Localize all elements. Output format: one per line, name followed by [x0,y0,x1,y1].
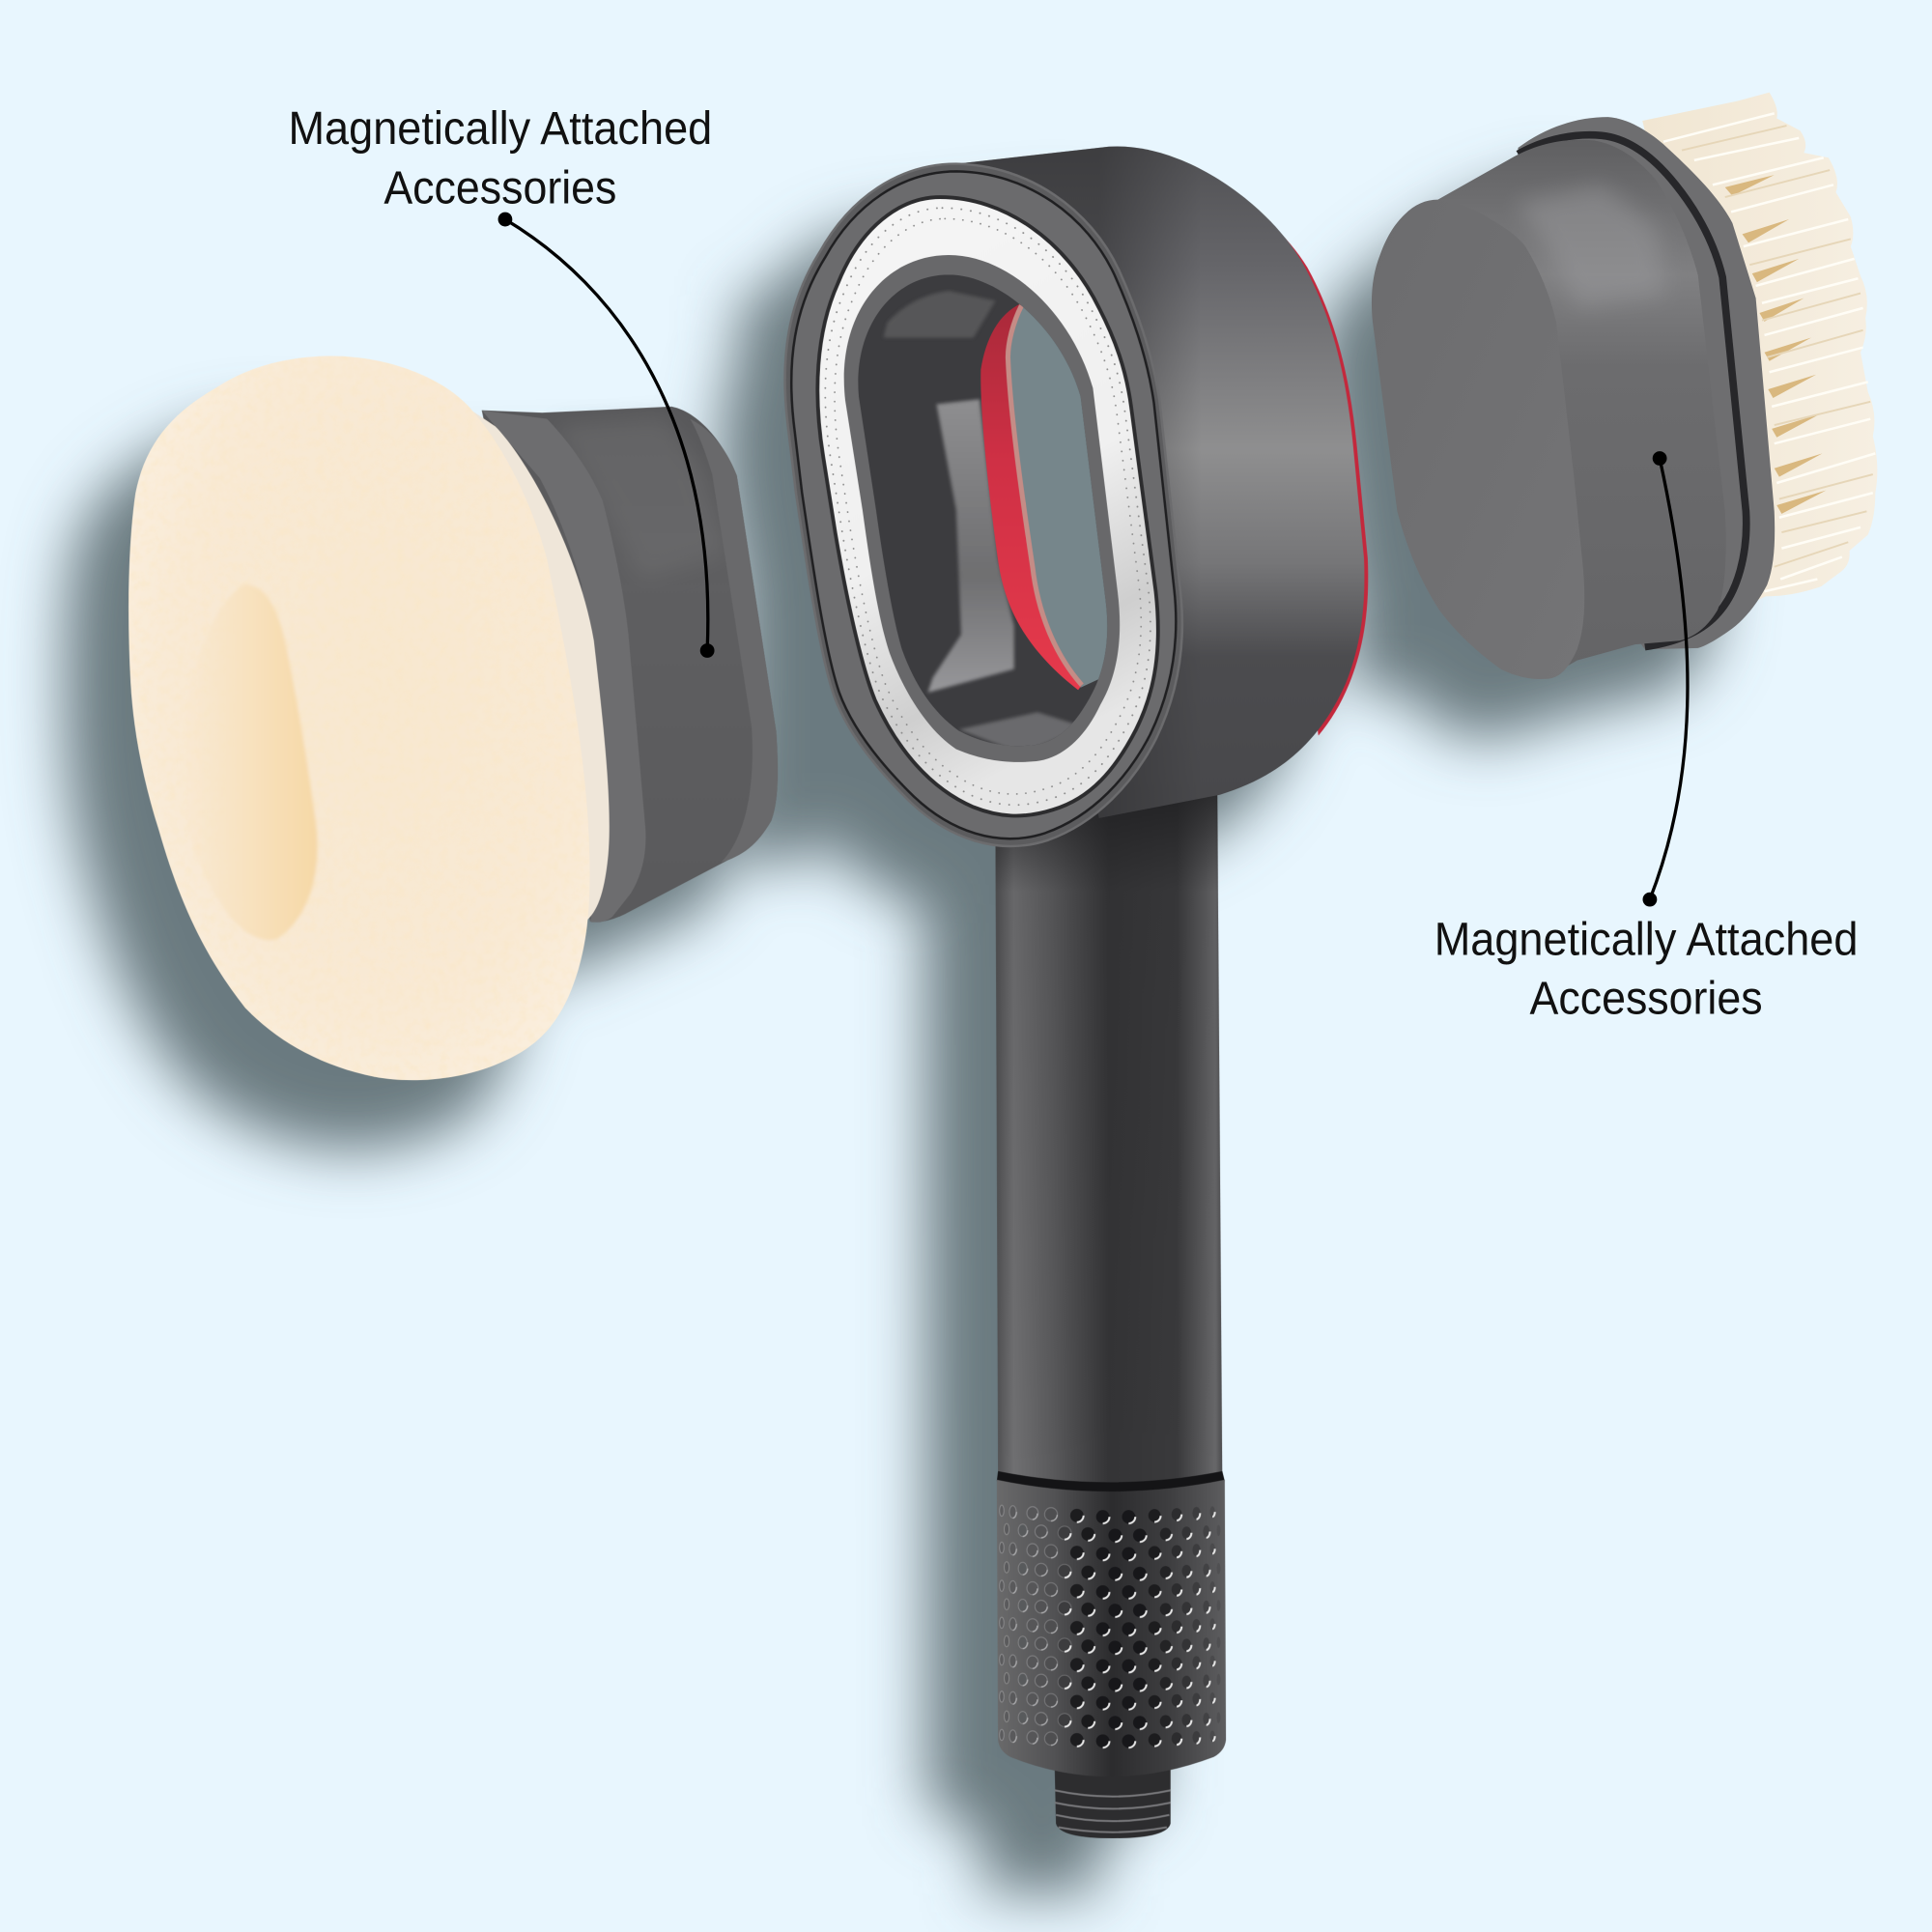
bristle fibres [1663,113,1875,591]
grip dimples [1000,1505,1220,1747]
collar ring [1518,117,1775,649]
body gloss [1516,185,1665,308]
interior light block [927,399,1014,693]
foam mesh texture [128,356,590,1080]
handle shaft [996,795,1222,1486]
leader end dot [1643,893,1657,907]
white LED ring [817,197,1158,816]
thread connector [1055,1770,1171,1838]
centre hollow [179,584,317,940]
base rim [690,419,778,863]
see-through window [1010,305,1107,688]
label text [1435,914,1858,1025]
leader line [505,219,708,650]
drop shadows behind product [65,179,1718,1892]
label text: Accessories [384,161,616,213]
upper interior surface [884,291,996,337]
callout: left label [288,102,715,658]
shaft shading under head [996,795,1222,1486]
textured grip [997,1480,1226,1776]
foam pad [128,356,590,1080]
dark housing [956,146,1364,818]
bristles [1642,93,1877,604]
red edge trim [1244,203,1368,735]
label text: Magnetically Attached [288,102,712,155]
pale band edge [1008,305,1082,685]
leader end dot [700,643,715,658]
collar band [482,411,646,923]
leader start dot [1653,451,1667,466]
label text [288,102,712,213]
ring perforation dots [825,208,1151,805]
leader line [1650,458,1688,899]
head front face [785,164,1182,846]
backing disk [473,412,610,922]
seam ring [997,1471,1225,1492]
collar groove [1518,135,1747,647]
bristle root gaps [1725,175,1826,514]
connector body [1438,140,1726,679]
end face [1372,200,1584,679]
head body [956,146,1368,818]
opening interior [858,274,1107,746]
inner rim [844,255,1120,762]
leader start dot [498,213,512,226]
sponge accessory [128,356,778,1080]
label text: Magnetically Attached [1435,914,1858,966]
outer bezel [785,164,1182,846]
base top gloss [554,416,727,579]
callout: right label [1435,451,1858,1025]
handle [996,795,1226,1838]
brush accessory [1372,93,1877,679]
label text: Accessories [1530,973,1763,1025]
red inner band [980,303,1082,690]
lower reflection [960,711,1073,746]
magnetic base [482,407,778,923]
